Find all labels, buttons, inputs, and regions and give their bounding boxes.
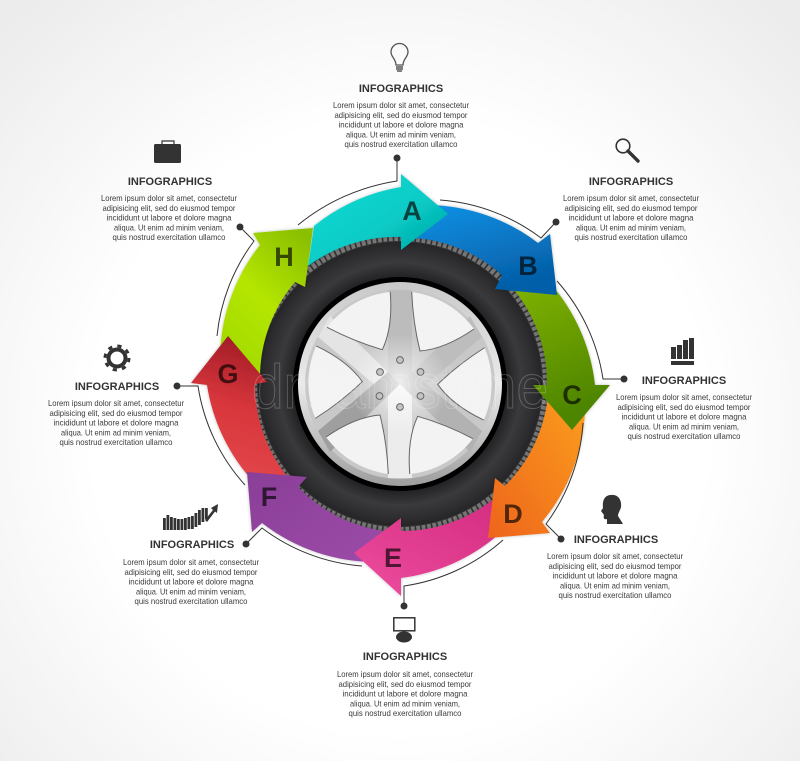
text block: right bbox=[616, 375, 752, 441]
arrow F bbox=[247, 472, 392, 562]
text block: lower right: adipisicing elit, sed do eiusmod tempor bbox=[548, 562, 682, 571]
icon: head silhouette bbox=[601, 495, 623, 524]
text block: upper right: incididunt ut labore et dolore magna bbox=[568, 214, 694, 222]
text block: top: aliqua. Ut enim ad minim veniam, bbox=[346, 130, 456, 140]
icon: bar chart bbox=[671, 338, 694, 365]
text block: lower left bbox=[123, 539, 259, 606]
icon: gear bbox=[105, 346, 129, 370]
text block: left: quis nostrud exercitation ullamco bbox=[60, 438, 173, 447]
text block: upper left: INFOGRAPHICS bbox=[128, 176, 212, 188]
text block: lower left: incididunt ut labore et dolore magna bbox=[128, 578, 254, 586]
text block: bottom: quis nostrud exercitation ullamco bbox=[348, 709, 462, 718]
text block: bottom: INFOGRAPHICS bbox=[363, 651, 447, 663]
arrow G bbox=[191, 336, 286, 478]
arrow letters: C bbox=[562, 380, 582, 410]
icon: briefcase bbox=[154, 141, 181, 163]
icon: rising graph bbox=[163, 504, 218, 530]
arrow B bbox=[415, 205, 557, 295]
arrow letters: G bbox=[217, 359, 239, 389]
text block: left bbox=[48, 381, 184, 447]
arrow letters bbox=[217, 196, 582, 573]
text block: upper left bbox=[101, 176, 237, 242]
text block: top: Lorem ipsum dolor sit amet, consectetur bbox=[333, 101, 469, 110]
text block: upper left: aliqua. Ut enim ad minim veniam, bbox=[114, 224, 224, 232]
text block: lower right: quis nostrud exercitation ullamco bbox=[558, 591, 672, 600]
arrow letters: B bbox=[518, 251, 538, 281]
text block: upper right: aliqua. Ut enim ad minim veniam, bbox=[576, 224, 686, 232]
text block: lower left: aliqua. Ut enim ad minim veniam, bbox=[136, 588, 246, 596]
text block: upper left: Lorem ipsum dolor sit amet, consectetur bbox=[101, 194, 237, 203]
text block: upper right bbox=[563, 176, 699, 242]
wheel bolts bbox=[376, 357, 424, 410]
text block: upper left: adipisicing elit, sed do eiusmod tempor bbox=[102, 204, 236, 213]
connector lines bbox=[177, 158, 624, 606]
text block: right: INFOGRAPHICS bbox=[642, 375, 726, 387]
icon: monitor bbox=[394, 618, 415, 642]
text block: lower left: Lorem ipsum dolor sit amet, consectetur bbox=[123, 558, 259, 567]
arrow letters: D bbox=[503, 499, 523, 529]
text block: bottom: incididunt ut labore et dolore magna bbox=[342, 690, 468, 698]
text block: top: quis nostrud exercitation ullamco bbox=[344, 140, 458, 149]
text block: upper right: INFOGRAPHICS bbox=[589, 176, 673, 188]
text block: left: aliqua. Ut enim ad minim veniam, bbox=[61, 428, 171, 438]
watermark: dreamstime bbox=[252, 353, 548, 422]
rim windows bbox=[284, 273, 516, 493]
arrow D bbox=[488, 395, 585, 538]
alloy rim bbox=[284, 273, 516, 493]
text block: lower left: adipisicing elit, sed do eiusmod tempor bbox=[124, 568, 258, 577]
wheel bbox=[254, 238, 546, 530]
text block: top: incididunt ut labore et dolore magna bbox=[338, 120, 464, 130]
text block: bottom: adipisicing elit, sed do eiusmod tempor bbox=[338, 680, 472, 689]
text block: bottom bbox=[337, 651, 473, 718]
text block: top: adipisicing elit, sed do eiusmod tempor bbox=[334, 111, 468, 120]
arrow ring bbox=[191, 174, 610, 596]
text block: lower right: Lorem ipsum dolor sit amet, consectetur bbox=[547, 552, 683, 561]
text block: right: Lorem ipsum dolor sit amet, consectetur bbox=[616, 393, 752, 402]
text block: lower right bbox=[547, 534, 683, 600]
text block: bottom: Lorem ipsum dolor sit amet, consectetur bbox=[337, 670, 473, 679]
text block: right: adipisicing elit, sed do eiusmod tempor bbox=[618, 403, 751, 412]
arrow A bbox=[308, 174, 448, 266]
text block: left: Lorem ipsum dolor sit amet, consectetur bbox=[48, 399, 184, 408]
text block: bottom: aliqua. Ut enim ad minim veniam, bbox=[350, 700, 460, 708]
tire bbox=[254, 238, 546, 530]
text block: upper left: quis nostrud exercitation ullamco bbox=[112, 233, 226, 242]
text block: left: INFOGRAPHICS bbox=[75, 381, 159, 393]
text block: lower right: incididunt ut labore et dolore magna bbox=[552, 572, 678, 580]
arrow letters: F bbox=[261, 482, 277, 512]
text block: lower left: INFOGRAPHICS bbox=[150, 539, 234, 551]
text block: right: aliqua. Ut enim ad minim veniam, bbox=[629, 422, 739, 432]
text block: left: incididunt ut labore et dolore magna bbox=[54, 418, 179, 428]
arrow E bbox=[354, 498, 498, 596]
text block: right: incididunt ut labore et dolore magna bbox=[622, 412, 747, 422]
text block: upper left: incididunt ut labore et dolore magna bbox=[106, 214, 232, 222]
text block: lower right: aliqua. Ut enim ad minim veniam, bbox=[560, 582, 670, 590]
text block: right: quis nostrud exercitation ullamco bbox=[628, 432, 741, 441]
arrow H bbox=[220, 228, 313, 378]
text block: top bbox=[333, 83, 469, 149]
text block: top: INFOGRAPHICS bbox=[359, 83, 443, 95]
text block: upper right: adipisicing elit, sed do eiusmod tempor bbox=[564, 204, 698, 213]
text block: lower left: quis nostrud exercitation ullamco bbox=[134, 597, 248, 606]
text block: lower right: INFOGRAPHICS bbox=[574, 534, 658, 546]
arrow C bbox=[510, 280, 610, 430]
connector dots bbox=[174, 154, 628, 610]
text block: upper right: Lorem ipsum dolor sit amet, consectetur bbox=[563, 194, 699, 203]
text block: left: adipisicing elit, sed do eiusmod tempor bbox=[50, 409, 183, 418]
arrow letters: E bbox=[384, 543, 402, 573]
arrow letters: A bbox=[402, 196, 422, 226]
text block: upper right: quis nostrud exercitation ullamco bbox=[574, 233, 688, 242]
icon: light bulb bbox=[391, 44, 408, 71]
arrow letters: H bbox=[274, 242, 294, 272]
icon: magnifier bbox=[616, 139, 638, 161]
